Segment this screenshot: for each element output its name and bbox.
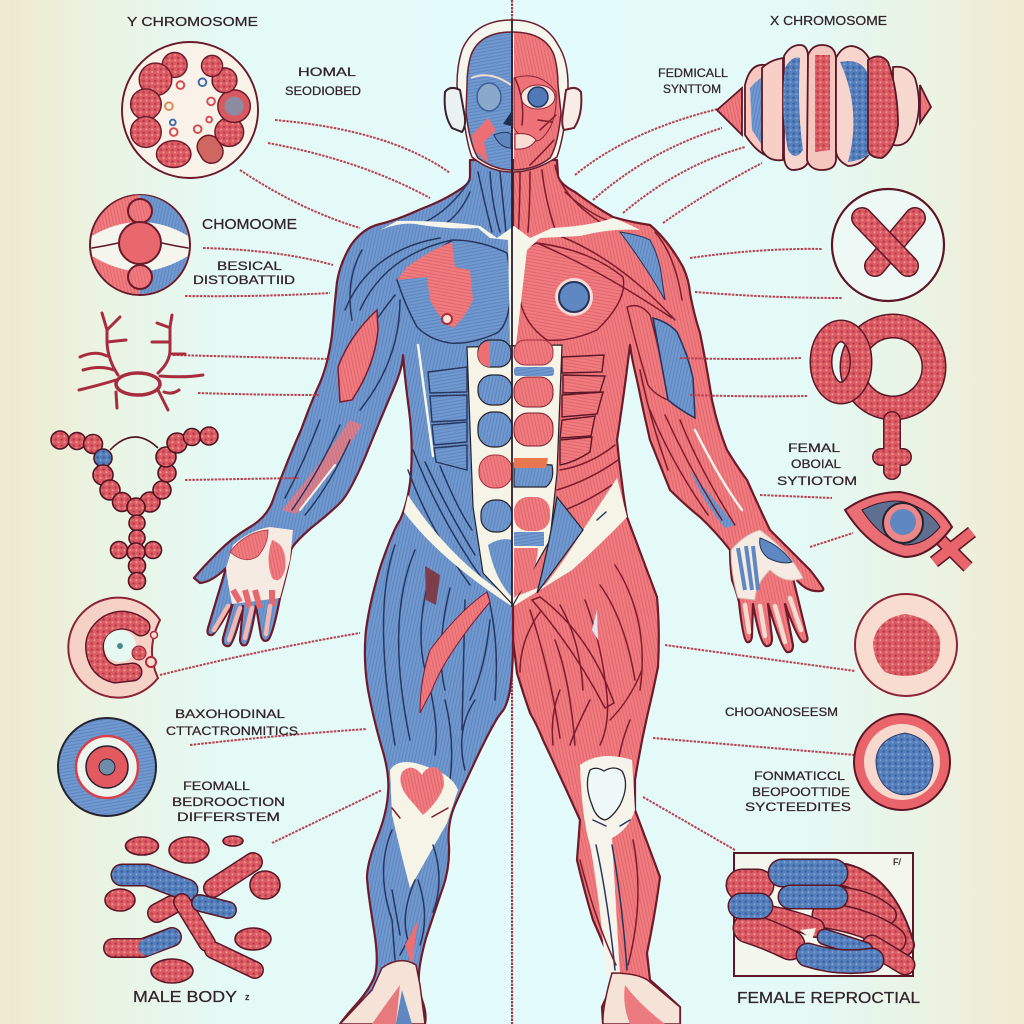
red sartorius strip — [420, 592, 490, 713]
left abdomen rib blocks — [428, 367, 467, 470]
right arm muscles — [627, 306, 668, 400]
left oblique — [408, 450, 483, 585]
label: fonatical reproductive: SYCTEEDITES — [745, 800, 851, 814]
right oblique — [557, 445, 618, 510]
icon: blue tissue in red ring — [854, 714, 950, 810]
left foot — [340, 961, 425, 1024]
white hip wedge — [512, 478, 627, 606]
right half of body (red) — [512, 32, 823, 1024]
icon: male chromosome cluster — [105, 836, 280, 983]
left biceps red — [338, 310, 378, 402]
left face — [466, 32, 511, 170]
label: female system: FEDMICALL — [658, 66, 728, 80]
white V band — [404, 495, 513, 607]
label: fonatical reproductive: FONMATICCL — [754, 769, 845, 783]
icon: C shaped cell — [68, 598, 160, 698]
right calf muscles — [580, 840, 638, 965]
nose shadow — [503, 112, 511, 126]
label: female social system: SYTIOTOM — [777, 474, 857, 488]
right knee and tibia — [580, 756, 635, 975]
icon: Y shaped bead chromosome — [51, 427, 218, 590]
label: female reproduction: FEOMALL — [183, 779, 250, 793]
right foot — [603, 973, 680, 1024]
icon: X in circle — [832, 189, 944, 301]
left calf muscles — [384, 830, 439, 960]
icon: X chromosome barrel — [717, 45, 931, 170]
label: chromosomal characteristics: CTTACTRONMITICS — [166, 724, 298, 738]
right abdomen rib blocks — [560, 355, 605, 465]
label: chromosomal characteristics: BAXOHODINAL — [175, 707, 285, 721]
label: female reproduction: DIFFERSTEM — [177, 810, 280, 824]
label: female reproduction — [172, 779, 285, 824]
right hand — [731, 530, 803, 642]
red chest patch with nipple — [397, 242, 473, 328]
icon: blue target cell — [58, 718, 156, 816]
icon: branching vessel — [79, 313, 203, 410]
right neck — [518, 165, 612, 238]
icon: pink tissue cell — [855, 594, 957, 696]
label: distributed: DISTOBATTIID — [193, 273, 295, 287]
left chest — [397, 240, 511, 343]
right chest — [520, 243, 624, 340]
right ear — [562, 88, 581, 130]
icon: Y chromosome cell — [122, 42, 258, 178]
icon: female symbol chromosome — [821, 326, 934, 471]
left thigh muscles — [384, 545, 496, 780]
right face — [514, 32, 561, 170]
label: male body: MALE BODY — [133, 989, 237, 1006]
title: X chromosome: X CHROMOSOME — [770, 13, 887, 28]
right pectoral node — [555, 278, 593, 316]
central abdomen panel — [467, 340, 583, 605]
groin detail — [425, 566, 440, 605]
label: biological distribution: BESICAL — [217, 259, 282, 273]
title: Y chromosome: Y CHROMOSOME — [127, 14, 258, 29]
label: chromosome: CHOMOOME — [202, 216, 297, 233]
figure: human body split male and female — [194, 20, 823, 1024]
icon: female chromosome cluster in frame — [734, 853, 913, 976]
central body line — [511, 20, 513, 607]
label: hormonal: HOMAL — [298, 65, 356, 79]
label: background: SEODIOBED — [285, 84, 361, 98]
label: female reproduction: BEDROOCTION — [172, 795, 285, 809]
label: frame note: F/ — [893, 857, 901, 867]
right shoulder band — [620, 232, 665, 300]
label: female social system: FEMAL — [788, 441, 840, 455]
label: small mark: z — [245, 992, 250, 1002]
label: fonatical reproductive: BEOPOOTTIDE — [752, 785, 850, 799]
icon: eye with cross — [845, 492, 972, 567]
label: female system — [658, 66, 728, 96]
head outline — [457, 20, 568, 172]
leader lines — [160, 108, 855, 850]
right thigh muscles — [532, 597, 614, 708]
label: chromosome system: CHOOANOSEESM — [725, 705, 838, 719]
centre divider line — [511, 0, 513, 1024]
label: female social system: OBOIAL — [791, 457, 841, 471]
clavicle and centre white strips — [380, 218, 640, 345]
label: chromosomal characteristics — [166, 707, 298, 738]
label: fonatical reproductive — [745, 769, 851, 814]
label: female reproductive: FEMALE REPROCTIAL — [737, 990, 920, 1007]
label: female social system — [777, 441, 857, 488]
left knee with heart — [390, 762, 458, 888]
left half of body (blue) — [194, 32, 513, 1024]
left side band — [418, 345, 433, 456]
left hand — [214, 527, 293, 640]
left shoulder muscles — [345, 238, 452, 345]
icon: chromosome sphere — [90, 195, 190, 295]
left neck — [425, 172, 506, 232]
left ear — [445, 88, 465, 132]
label: female system: SYNTTOM — [663, 82, 721, 96]
forearm muscles — [282, 300, 400, 515]
